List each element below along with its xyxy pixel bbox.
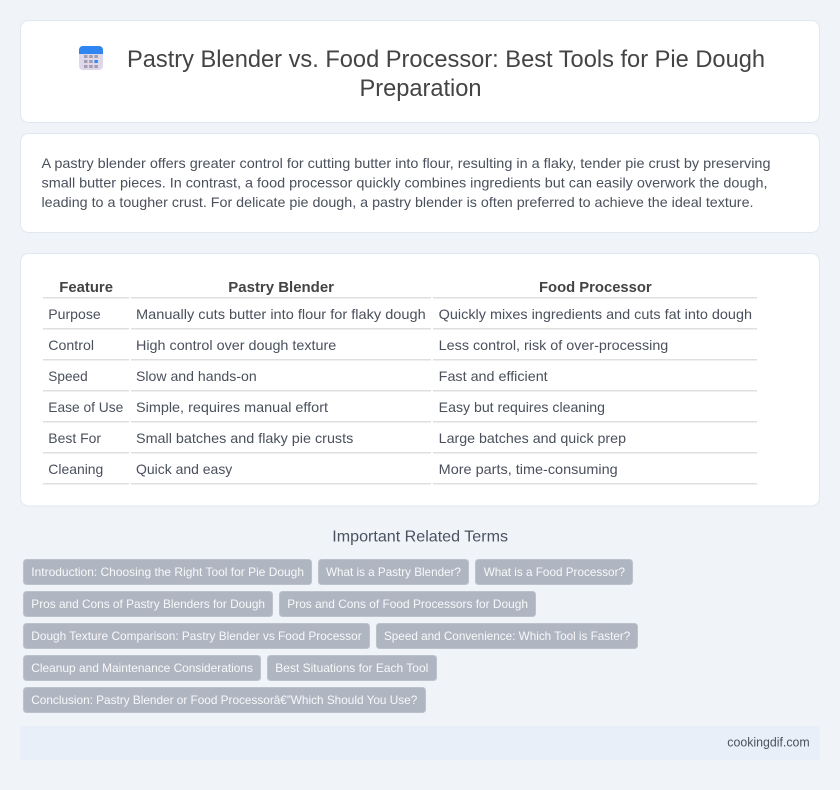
table row: speed: Fast and efficient bbox=[439, 368, 548, 384]
tag: Pros and Cons of Food Processors for Dough bbox=[287, 597, 528, 611]
tag bbox=[24, 560, 312, 584]
table row: purpose bbox=[48, 306, 752, 322]
table row: control: Control bbox=[48, 337, 94, 353]
table row: cleaning bbox=[48, 461, 618, 477]
tag bbox=[24, 656, 260, 680]
table row: speed bbox=[48, 368, 548, 384]
tag bbox=[376, 624, 638, 648]
table header: Pastry Blender bbox=[228, 280, 334, 296]
title: Preparation bbox=[360, 75, 482, 102]
table row: ease of use: Ease of Use bbox=[48, 399, 124, 415]
footer bbox=[20, 726, 820, 760]
table row: speed: Slow and hands-on bbox=[136, 368, 257, 384]
table row: purpose: Manually cuts butter into flour for flaky dough bbox=[136, 306, 426, 322]
tag bbox=[280, 592, 536, 616]
title: Pastry Blender vs. Food Processor: Best Tools for Pie Dough bbox=[127, 46, 765, 73]
tag: Introduction: Choosing the Right Tool for Pie Dough bbox=[31, 565, 304, 579]
panel: title header bbox=[20, 20, 820, 122]
heading: important related terms: Important Related Terms bbox=[332, 528, 508, 546]
tag: Speed and Convenience: Which Tool is Faster? bbox=[384, 629, 631, 643]
panel: comparison table bbox=[20, 254, 820, 506]
text block: intro: leading to a tougher crust. For delicate pie dough, a pastry blender is often preferred to achieve the ideal texture. bbox=[42, 194, 753, 210]
table row: best for: Large batches and quick prep bbox=[439, 430, 626, 446]
table row: ease of use bbox=[48, 399, 605, 415]
table header bbox=[59, 280, 652, 296]
tag bbox=[24, 592, 272, 616]
tag: Dough Texture Comparison: Pastry Blender vs Food Processor bbox=[31, 629, 362, 643]
text block: intro: small butter pieces. In contrast, a food processor quickly combines ingredients but can easily overwork the dough, bbox=[42, 175, 768, 191]
tag: Cleanup and Maintenance Considerations bbox=[31, 661, 253, 675]
table row: cleaning: More parts, time-consuming bbox=[439, 461, 618, 477]
table row: best for: Best For bbox=[48, 430, 101, 446]
text block: intro: A pastry blender offers greater control for cutting butter into flour, resulting in a flaky, tender pie crust by preserving bbox=[42, 155, 770, 171]
tag bbox=[24, 624, 370, 648]
table row: control bbox=[48, 337, 668, 353]
tag: What is a Food Processor? bbox=[484, 565, 625, 579]
tag bbox=[476, 560, 632, 584]
table row: control: Less control, risk of over-processing bbox=[439, 337, 668, 353]
table row: best for: Small batches and flaky pie crusts bbox=[136, 430, 353, 446]
table row: control: High control over dough texture bbox=[136, 337, 337, 353]
table row: cleaning: Cleaning bbox=[48, 461, 103, 477]
table row: best for bbox=[48, 430, 626, 446]
table row: ease of use: Easy but requires cleaning bbox=[439, 399, 605, 415]
tag: Pros and Cons of Pastry Blenders for Dough bbox=[31, 597, 265, 611]
tag: Conclusion: Pastry Blender or Food Processorâ€”Which Should You Use? bbox=[31, 693, 418, 707]
footer: cookingdif.com bbox=[727, 736, 810, 750]
table row: purpose: Purpose bbox=[48, 306, 101, 322]
panel: intro paragraph bbox=[20, 134, 820, 232]
tag bbox=[24, 688, 426, 712]
table row: purpose: Quickly mixes ingredients and cuts fat into dough bbox=[439, 306, 752, 322]
tag: What is a Pastry Blender? bbox=[326, 565, 461, 579]
tag bbox=[268, 656, 436, 680]
tag bbox=[318, 560, 468, 584]
related terms tags bbox=[24, 560, 638, 712]
text block: intro bbox=[42, 155, 770, 210]
table header: Feature bbox=[59, 280, 113, 296]
title bbox=[127, 46, 765, 102]
table header: Food Processor bbox=[539, 280, 652, 296]
table row: ease of use: Simple, requires manual effort bbox=[136, 399, 328, 415]
tag: Best Situations for Each Tool bbox=[275, 661, 428, 675]
icon: calendar bbox=[79, 46, 103, 70]
table row: cleaning: Quick and easy bbox=[136, 461, 232, 477]
table row: speed: Speed bbox=[48, 368, 88, 384]
